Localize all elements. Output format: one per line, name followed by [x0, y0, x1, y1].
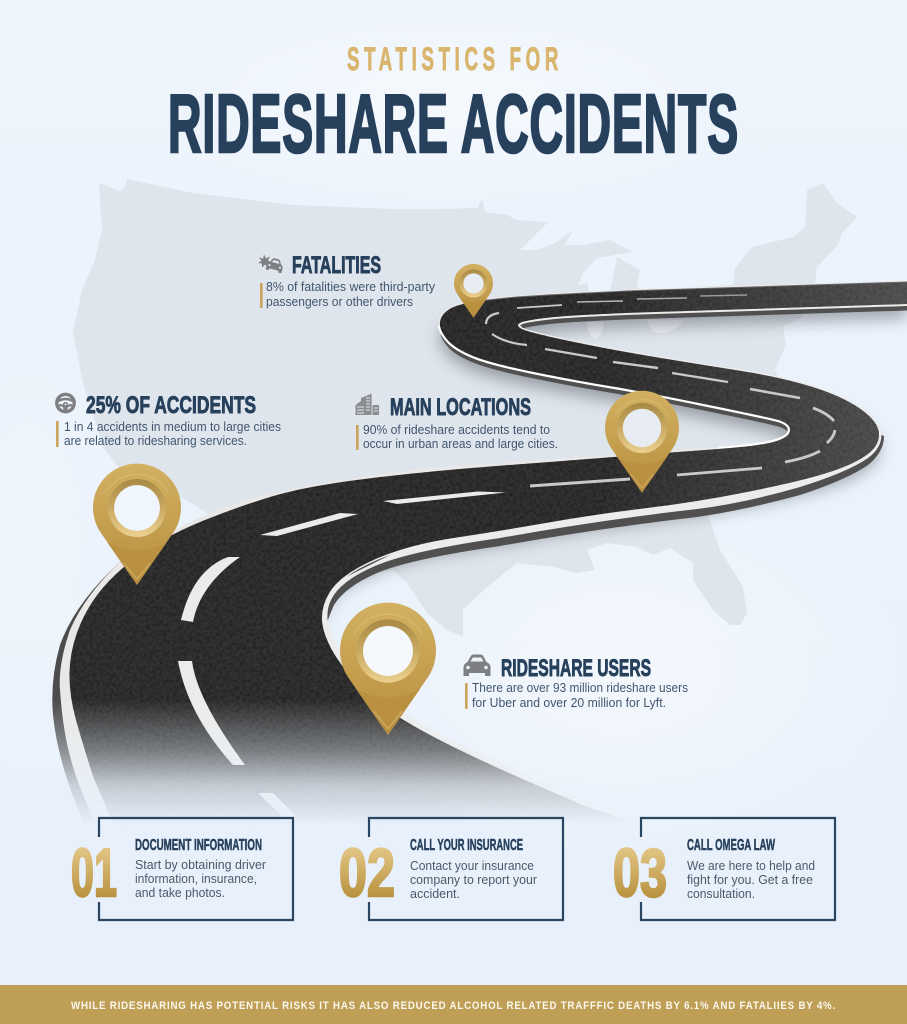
card frame — [99, 818, 293, 920]
card text: company to report your — [410, 873, 537, 887]
pin: middle right — [605, 391, 679, 493]
accent bar — [356, 425, 359, 450]
card text: Start by obtaining driver — [135, 858, 266, 872]
icon: city buildings — [356, 394, 379, 415]
card heading: CALL YOUR INSURANCE — [410, 837, 523, 854]
road side shade — [327, 306, 907, 621]
card text: Contact your insurance — [410, 859, 534, 873]
text: fatalities — [266, 280, 436, 309]
number 01: 01 — [71, 835, 117, 911]
card 2: call your insurance — [339, 818, 563, 920]
card text: fight for you. Get a free — [687, 873, 813, 887]
pin: far end — [454, 264, 493, 318]
thin dashed centre line — [486, 295, 835, 486]
road left shade — [52, 562, 120, 825]
text: rideshare users: There are over 93 million rideshare users — [472, 681, 688, 695]
winding road — [52, 282, 907, 849]
map of the United States — [73, 179, 857, 637]
text: main locations: 90% of rideshare accidents tend to — [363, 423, 550, 437]
footer banner — [0, 985, 907, 1024]
card frame — [641, 818, 835, 920]
road asphalt — [69, 282, 907, 835]
title: statistics for: STATISTICS FOR — [347, 41, 563, 77]
card text: consultation. — [687, 887, 755, 901]
heading: fatalities: FATALITIES — [292, 252, 381, 279]
text: main locations: occur in urban areas and large cities. — [363, 437, 558, 451]
text: fatalities: 8% of fatalities were third-party — [266, 280, 436, 294]
card 1: document information — [71, 818, 293, 920]
road far end highlight — [668, 282, 907, 504]
number 02: 02 — [339, 835, 395, 911]
heading: 25% of accidents: 25% OF ACCIDENTS — [86, 392, 256, 419]
panel: main locations — [356, 394, 558, 451]
card heading: CALL OMEGA LAW — [687, 837, 776, 854]
icon: steering wheel — [57, 394, 74, 412]
text: fatalities: passengers or other drivers — [266, 295, 413, 309]
icon: car — [464, 654, 490, 676]
card text — [687, 859, 815, 901]
heading: main locations: MAIN LOCATIONS — [390, 394, 531, 421]
accent bar — [56, 421, 59, 447]
icon: crashed car — [258, 254, 284, 273]
card text: accident. — [410, 887, 460, 901]
card heading: DOCUMENT INFORMATION — [135, 837, 262, 854]
pin: large left — [93, 464, 181, 585]
card text: and take photos. — [135, 886, 225, 900]
card text: We are here to help and — [687, 859, 815, 873]
panel: 25% of accidents — [56, 392, 281, 448]
road edge lines — [60, 282, 907, 840]
card 3: call omega law — [613, 818, 835, 920]
accent bar — [465, 683, 468, 709]
accent bar — [260, 283, 263, 308]
panel: fatalities — [258, 252, 436, 309]
card text — [135, 858, 266, 900]
text: 25% of accidents: are related to ridesharing services. — [64, 434, 247, 448]
text: rideshare users — [472, 681, 688, 710]
text: main locations — [363, 423, 558, 451]
card frame — [369, 818, 563, 920]
pin: large lower — [340, 603, 436, 735]
heading: rideshare users: RIDESHARE USERS — [501, 655, 651, 682]
panel: rideshare users — [464, 654, 688, 710]
number 03: 03 — [613, 835, 667, 911]
card text: information, insurance, — [135, 872, 257, 886]
road soft shadow — [328, 310, 907, 622]
text: rideshare users: for Uber and over 20 million for Lyft. — [472, 696, 666, 710]
wide dashed centre line — [178, 492, 506, 817]
text: 25% of accidents — [64, 420, 281, 448]
card text — [410, 859, 537, 901]
text: 25% of accidents: 1 in 4 accidents in medium to large cities — [64, 420, 281, 434]
road back edge — [485, 282, 907, 301]
